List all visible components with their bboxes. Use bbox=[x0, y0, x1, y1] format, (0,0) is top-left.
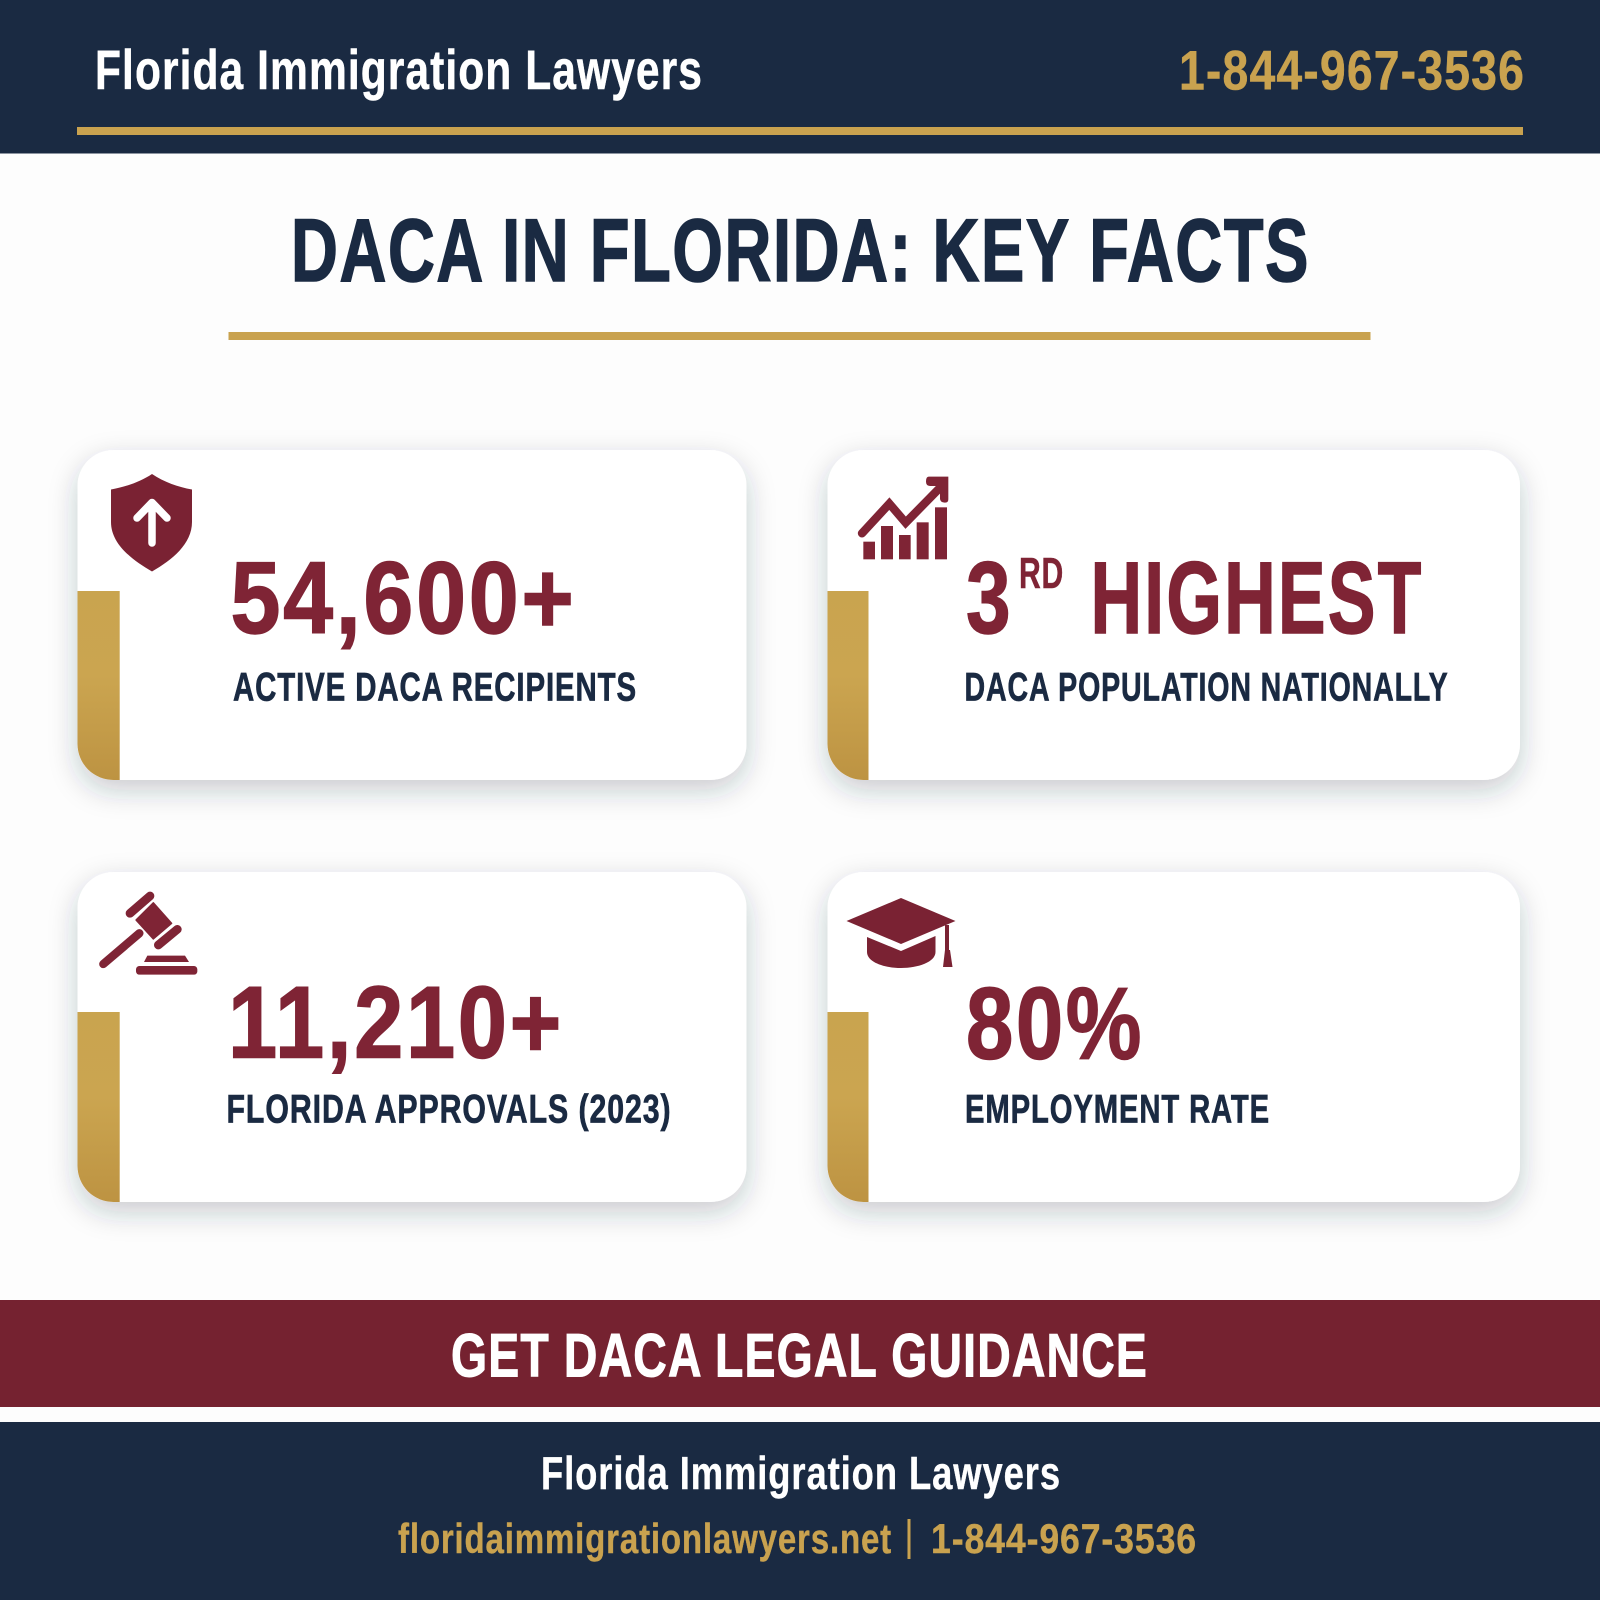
card background bbox=[78, 872, 746, 1202]
call to action banner bbox=[0, 1300, 1600, 1407]
statistic: 11,210+ bbox=[228, 966, 564, 1080]
title gold rule bbox=[228, 332, 1370, 340]
card background bbox=[828, 450, 1520, 780]
header firm name: Florida Immigration Lawyers bbox=[95, 38, 703, 101]
footer bbox=[0, 1422, 1600, 1600]
statistic label: EMPLOYMENT RATE bbox=[965, 1088, 1270, 1132]
gold accent bbox=[828, 1012, 868, 1202]
card background bbox=[78, 450, 746, 780]
statistic: RD bbox=[1019, 549, 1064, 598]
call to action text: GET DACA LEGAL GUIDANCE bbox=[451, 1322, 1148, 1390]
footer phone number: 1-844-967-3536 bbox=[931, 1515, 1197, 1562]
statistic: HIGHEST bbox=[1090, 541, 1424, 655]
gold accent bbox=[78, 1012, 120, 1202]
statistic: 3 bbox=[966, 541, 1013, 655]
statistic label: ACTIVE DACA RECIPIENTS bbox=[233, 666, 637, 710]
statistic bbox=[966, 541, 1424, 655]
gold accent bbox=[78, 591, 120, 780]
header gold rule bbox=[77, 127, 1523, 135]
icon: rising bar chart with arrow bbox=[862, 477, 948, 559]
footer firm name: Florida Immigration Lawyers bbox=[541, 1447, 1061, 1499]
card background bbox=[828, 872, 1520, 1202]
icon: shield with up arrow bbox=[111, 474, 192, 572]
panel: active DACA recipients bbox=[78, 450, 746, 780]
statistic: 80% bbox=[966, 966, 1144, 1080]
footer website: floridaimmigrationlawyers.net bbox=[398, 1515, 892, 1562]
header bar bbox=[0, 0, 1600, 154]
gold accent bbox=[828, 591, 868, 780]
icon: graduation cap bbox=[846, 898, 956, 968]
panel: employment rate bbox=[828, 872, 1520, 1202]
icon: gavel bbox=[103, 896, 197, 975]
panel: Florida approvals bbox=[78, 872, 746, 1202]
panel: third highest population bbox=[828, 450, 1520, 780]
statistic: 54,600+ bbox=[230, 541, 576, 655]
statistic label: FLORIDA APPROVALS (2023) bbox=[226, 1088, 672, 1132]
footer separator bbox=[908, 1519, 910, 1559]
header phone number: 1-844-967-3536 bbox=[1179, 38, 1525, 102]
